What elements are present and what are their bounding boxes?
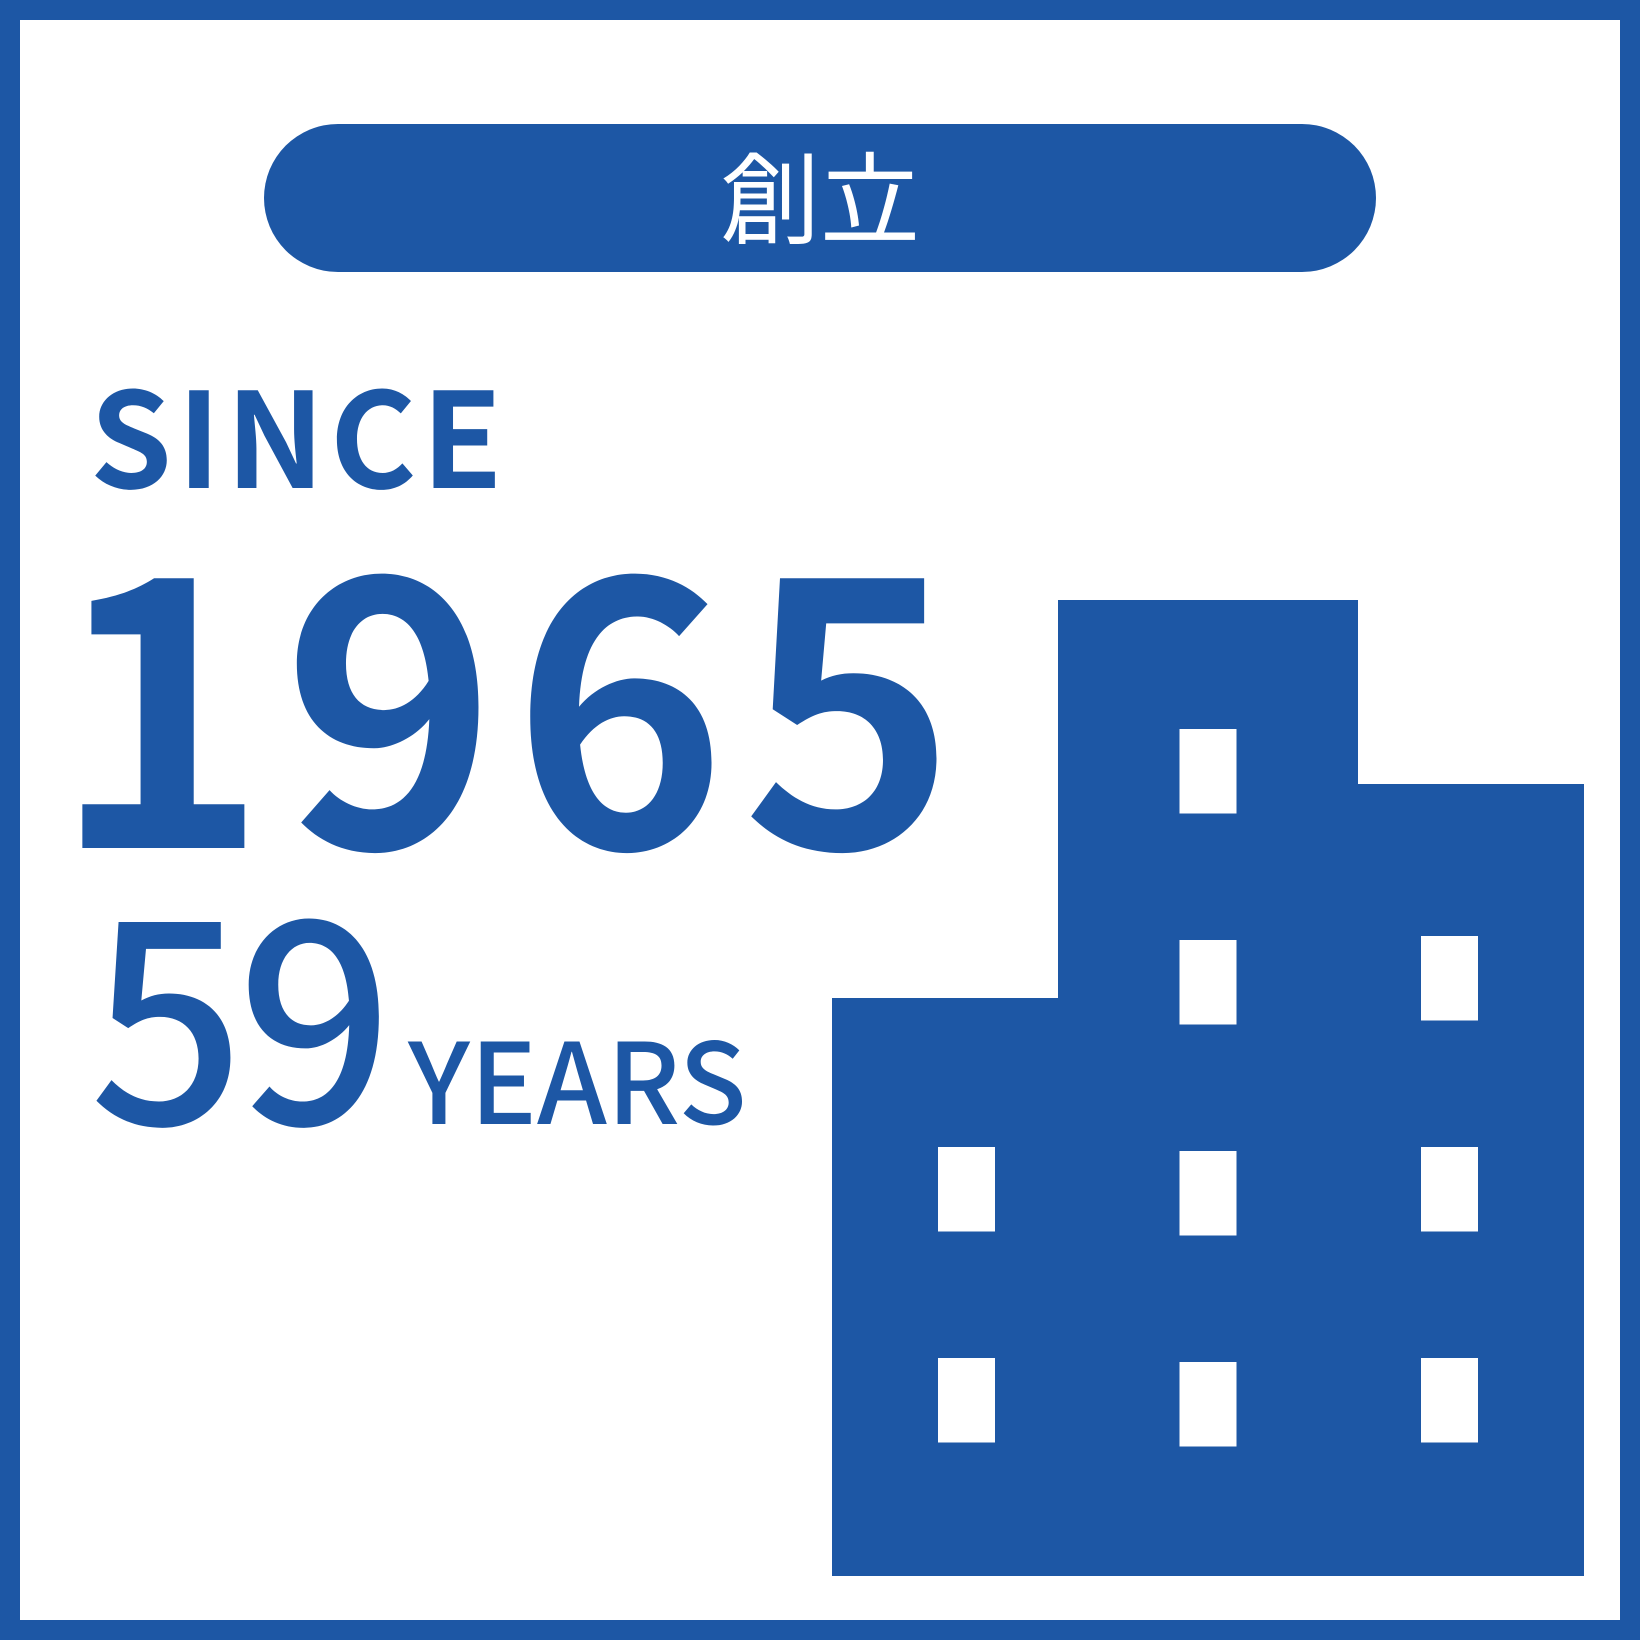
- founding year: 1965: 1965: [52, 426, 972, 953]
- years count: [89, 806, 747, 1203]
- icon: building: [832, 600, 1584, 1576]
- label: YEARS: YEARS: [407, 995, 747, 1157]
- windows: [938, 729, 1478, 1446]
- label: SINCE: SINCE: [90, 336, 508, 527]
- heading text: 創立: [720, 120, 920, 265]
- heading pill: [264, 120, 1376, 272]
- number: 59: 59: [89, 806, 385, 1203]
